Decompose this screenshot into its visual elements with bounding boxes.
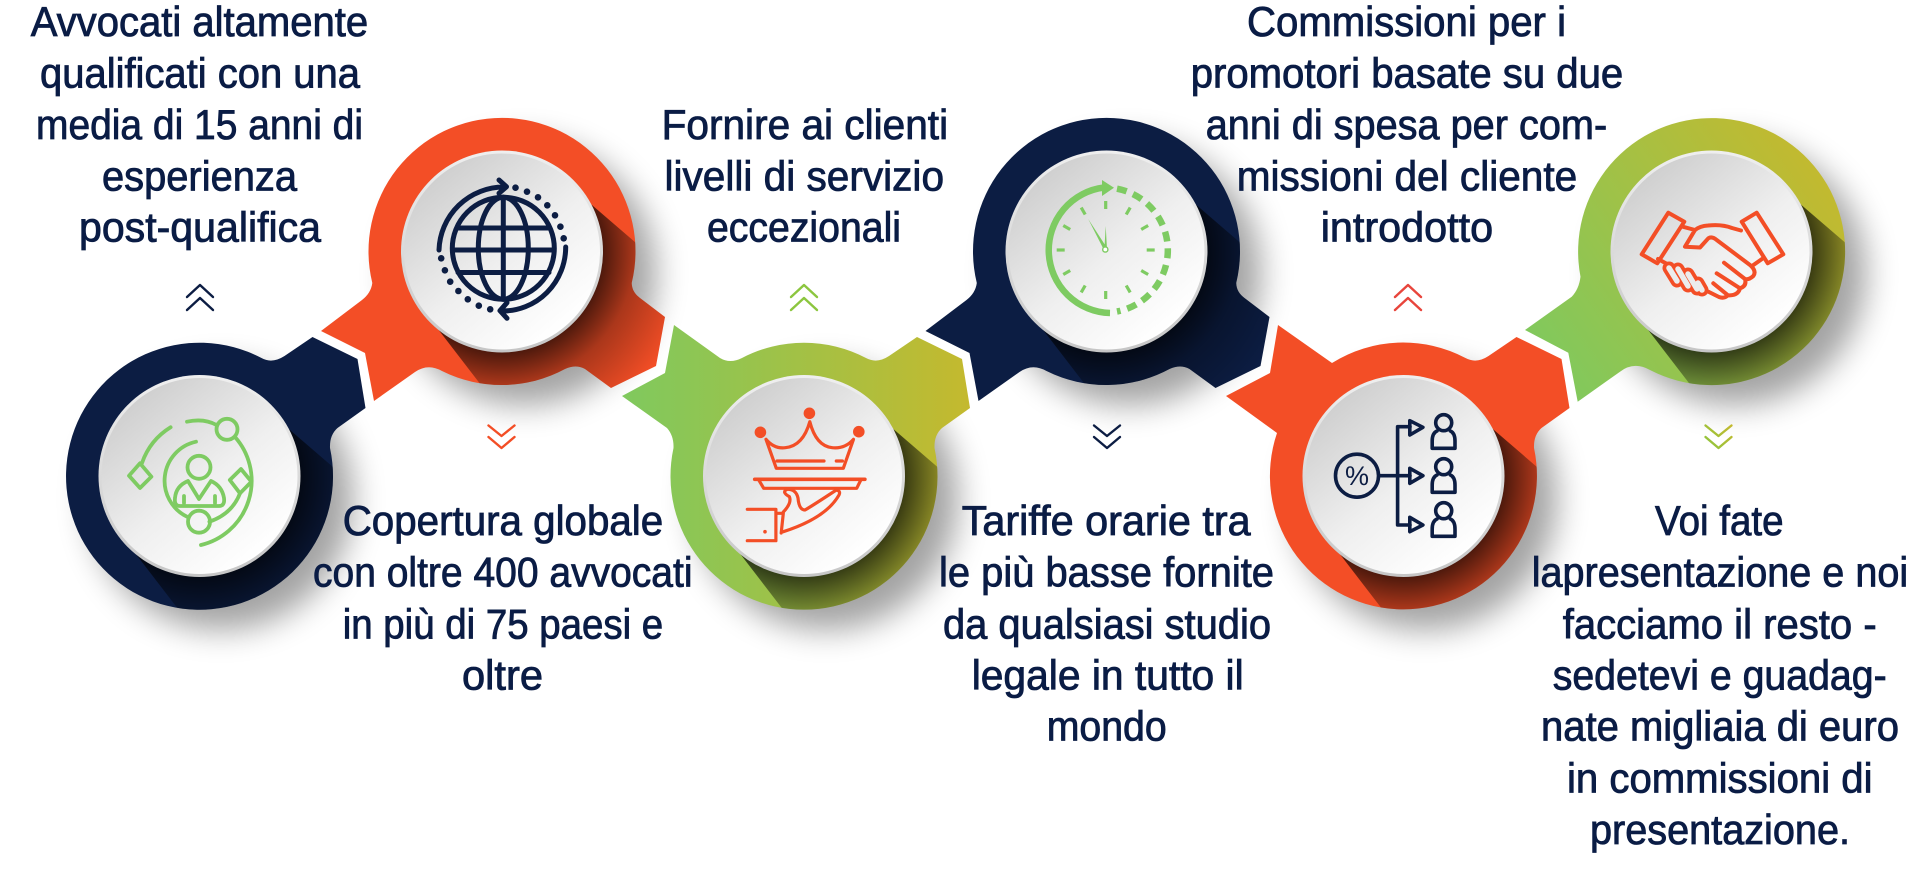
icon: handshake	[1642, 213, 1783, 298]
text block: step 2	[313, 497, 692, 698]
text block: step 2: in più di 75 paesi e	[343, 600, 663, 647]
icon: people network	[129, 419, 252, 545]
text block: step 4: da qualsiasi studio	[943, 600, 1271, 647]
text block: step 4	[939, 497, 1274, 750]
text block: step 5: missioni del cliente	[1237, 153, 1577, 200]
text block: step 1: qualificati con una	[40, 50, 361, 97]
soft drop shadows under the badges	[89, 141, 1866, 630]
icon: crown on serving tray	[747, 408, 865, 541]
text block: step 3: Fornire ai clienti	[662, 101, 948, 148]
text block: step 6	[1532, 497, 1908, 853]
icon: percentage to people: %	[1345, 461, 1369, 491]
text block: step 3: eccezionali	[707, 204, 901, 251]
arrow: step 5 chevrons up	[1395, 285, 1421, 310]
text block: step 6: in commissioni di	[1567, 754, 1872, 801]
text block: step 2: con oltre 400 avvocati	[313, 549, 692, 596]
text block: step 6: Voi fate	[1655, 497, 1784, 544]
text block: step 4: le più basse fornite	[939, 549, 1274, 596]
text block: step 6: facciamo il resto -	[1563, 600, 1877, 647]
text block: step 1: post-qualifica	[79, 204, 322, 251]
text block: step 3	[662, 101, 948, 251]
arrow: step 2 chevrons down	[488, 426, 514, 448]
text block: step 6: nate migliaia di euro	[1541, 703, 1899, 750]
arrow: step 6 chevrons down	[1706, 426, 1732, 448]
text block: step 1	[31, 0, 368, 251]
text block: step 3: livelli di servizio	[664, 153, 944, 200]
icon: globe with arrows	[438, 180, 567, 318]
text block: step 2: Copertura globale	[343, 497, 663, 544]
text block: step 4: legale in tutto il	[972, 651, 1244, 698]
text block: step 2: oltre	[462, 651, 543, 698]
text block: step 1: media di 15 anni di	[36, 101, 363, 148]
text block: step 5: introdotto	[1321, 204, 1493, 251]
text block: step 5	[1191, 0, 1623, 251]
text block: step 6: sedetevi e guadag-	[1553, 651, 1887, 698]
panel: step 1 navy badge	[66, 337, 366, 610]
icon: clock	[1049, 180, 1168, 313]
panel: step 5 orange badge	[1226, 325, 1570, 610]
icon: percentage to people	[1336, 415, 1455, 536]
arrow: step 1 chevrons up	[187, 285, 213, 310]
panel: step 2 orange badge	[321, 118, 665, 401]
text block: step 6: lapresentazione e noi	[1532, 549, 1908, 596]
text block: step 4: mondo	[1047, 703, 1167, 750]
text block: step 5: anni di spesa per com-	[1206, 101, 1607, 148]
panel: step 3 green badge	[622, 325, 970, 610]
text block: step 4: Tariffe orarie tra	[962, 497, 1251, 544]
text block: step 5: promotori basate su due	[1191, 50, 1623, 97]
text block: step 1: esperienza	[102, 153, 298, 200]
arrow: step 4 chevrons down	[1094, 426, 1120, 448]
panel: step 6 green badge	[1525, 118, 1846, 402]
arrow: step 3 chevrons up	[791, 285, 817, 310]
panel: step 4 navy badge	[926, 118, 1270, 401]
text block: step 6: presentazione.	[1590, 806, 1850, 853]
